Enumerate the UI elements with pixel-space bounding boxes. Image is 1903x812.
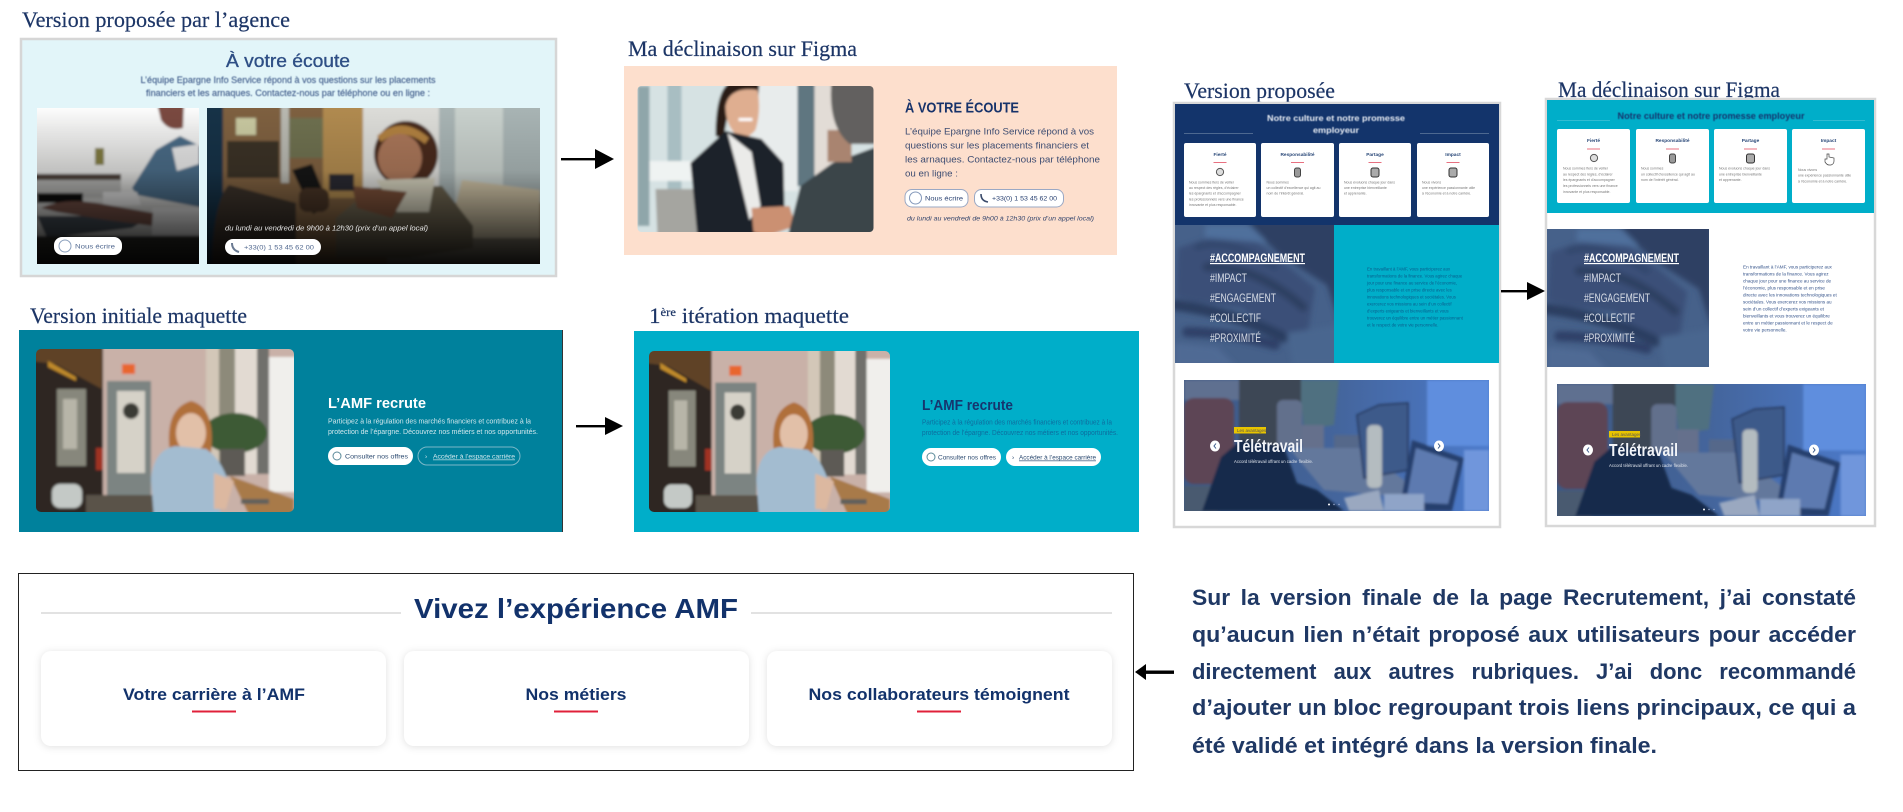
bandeau cyan: Notre culture et notre promesse employeur — [1618, 110, 1805, 121]
bloc hashtags: #ACCOMPAGNEMENT — [1210, 253, 1305, 265]
paragraphe: protection de l’épargne. Découvrez nos métiers et nos opportunités. — [328, 429, 538, 436]
titre: l'amf recrute: L’AMF recrute — [328, 396, 426, 412]
text block: commentaire final: qu’aucun lien n’était proposé aux utilisateurs pour accéder — [1192, 622, 1856, 647]
carte: partage: et apprenante. — [1344, 192, 1367, 196]
carrousel: télétravail: Télétravail — [1234, 436, 1303, 456]
carte: responsabilité: un collectif d’excellence qui agit au — [1266, 186, 1320, 190]
bloc texte cyan: trouverez un équilibre entre un métier passionnant — [1367, 316, 1464, 320]
carte: partage: Nous évoluons chaque jour dans — [1719, 166, 1770, 170]
carte: responsabilité: Nous sommes — [1266, 180, 1289, 184]
heading: ma déclinaison sur figma droite: Ma déclinaison sur Figma — [1558, 77, 1780, 102]
horaires: du lundi au vendredi de 9h00 à 12h30 (prix d’un appel local) — [225, 224, 428, 232]
button: téléphone — [225, 239, 321, 255]
paragraphe: protection de l’épargne. Découvrez nos métiers et nos opportunités. — [922, 430, 1118, 437]
button: espace carrière — [1006, 448, 1101, 466]
heading: 1ère itération maquette: ère — [661, 305, 676, 319]
bloc texte cyan: innovations technologiques et sociétales. Vous — [1367, 294, 1456, 300]
photo: femme au café — [36, 349, 294, 512]
paragraphe: questions sur les placements financiers et — [905, 140, 1089, 152]
carte: responsabilité — [1261, 143, 1334, 217]
button: nous écrire: Nous écrire — [925, 196, 963, 202]
bandeau navy: Notre culture et notre promesse — [1267, 113, 1405, 123]
bloc hashtags: #ENGAGEMENT — [1584, 293, 1650, 305]
carte: fierté: les professionnels vers une finance — [1563, 184, 1618, 188]
bloc hashtags — [1175, 220, 1340, 365]
carte: partage — [1339, 143, 1411, 217]
carte: responsabilité: un collectif d’excellence qui agit au — [1641, 172, 1695, 176]
paragraphe — [905, 126, 1100, 180]
carte: fierté: innovante et plus responsable. — [1189, 203, 1237, 207]
bloc texte cyan: et le respect de votre vie personnelle. — [1367, 322, 1438, 328]
carte: impact — [1417, 143, 1489, 217]
button: consulter nos offres: Consulter nos offres — [938, 454, 997, 462]
paragraphe: Participez à la régulation des marchés financiers et contribuez à la — [922, 420, 1112, 426]
carrousel: télétravail — [1184, 375, 1489, 512]
button: consulter nos offres — [328, 447, 413, 465]
panel: déclinaison figma culture employeur — [1546, 99, 1875, 526]
titre: l'amf recrute: L’AMF recrute — [922, 398, 1013, 414]
paragraphe déclinaison: sein d’un collectif d’experts exigeants et — [1743, 306, 1825, 312]
arrow: agence vers figma — [561, 149, 614, 169]
paragraphe — [922, 420, 1118, 437]
photo: poignée de main — [638, 86, 874, 232]
carte: nos métiers: Nos métiers — [526, 685, 626, 704]
carte: responsabilité: Nous sommes — [1641, 166, 1664, 170]
paragraphe déclinaison: votre vie personnelle. — [1743, 328, 1787, 332]
button: consulter nos offres — [922, 448, 1001, 466]
bloc texte cyan: plus responsable et en prise directe avec les — [1367, 288, 1452, 292]
arrow: version proposée vers figma — [1501, 282, 1545, 300]
carte: fierté: Fierté — [1213, 152, 1227, 158]
heading: ma déclinaison sur figma: Ma déclinaison sur Figma — [628, 36, 857, 61]
heading: 1ère itération maquette: itération maquette — [676, 303, 849, 328]
button: espace carrière: Accéder à l’espace carrière — [433, 454, 515, 460]
titre: à votre écoute: À VOTRE ÉCOUTE — [905, 100, 1019, 116]
photo: personne au clavier — [37, 108, 199, 264]
button: espace carrière: Accéder à l’espace carrière — [1019, 454, 1096, 462]
heading: version proposée par l'agence: Version proposée par l’agence — [22, 7, 290, 32]
panel: 1ère itération amf recrute — [634, 331, 1139, 532]
carte: nos métiers — [404, 651, 749, 746]
carte: impact: Nous vivons — [1422, 180, 1441, 184]
carte: partage: Partage — [1366, 152, 1384, 158]
bloc texte cyan: jour pour une finance au service de l’économie, — [1366, 280, 1457, 286]
carrousel: télétravail: Télétravail — [1609, 440, 1678, 460]
button: nous écrire — [905, 190, 968, 207]
carte: impact — [1792, 129, 1865, 203]
carte: impact: à l’économie et à notre carrière. — [1798, 180, 1847, 184]
button: téléphone — [974, 190, 1064, 207]
paragraphe déclinaison: entre un métier passionnant et le respect de — [1743, 320, 1833, 326]
paragraphe: L’équipe Epargne Info Service répond à vos — [905, 126, 1094, 138]
carte: partage: une entreprise bienveillante — [1719, 172, 1762, 176]
carte: partage: une entreprise bienveillante — [1344, 186, 1387, 190]
carte: responsabilité: nom de l’intérêt général. — [1266, 192, 1304, 196]
horaires: du lundi au vendredi de 9h00 à 12h30 (prix d’un appel local) — [907, 216, 1094, 222]
paragraphe: ou en ligne : — [905, 168, 958, 180]
paragraphe déclinaison: chaque jour pour une finance au service de — [1743, 278, 1832, 284]
paragraphe: Participez à la régulation des marchés financiers et contribuez à la — [328, 418, 531, 426]
text block: commentaire final: Sur la version finale de la page Recrutement, j’ai constaté — [1192, 585, 1856, 610]
carte: impact: Impact — [1445, 152, 1461, 158]
text block: commentaire final — [1192, 585, 1857, 758]
text block: commentaire final: d’ajouter un bloc regroupant trois liens principaux, ce qui a — [1192, 695, 1857, 720]
panel: vivez l'expérience amf — [18, 574, 1134, 770]
carte: impact: une expérience passionnante utile — [1422, 186, 1475, 190]
button: espace carrière — [418, 447, 520, 465]
carte: fierté: les épargnants et d’accompagner — [1563, 178, 1616, 182]
paragraphe déclinaison: bienveillants et vous trouverez un équilibre — [1743, 314, 1830, 318]
paragraphe déclinaison: l’économie, plus responsable et en prise — [1743, 286, 1825, 290]
carrousel: télétravail: Accord télétravail offrant un cadre flexible. — [1234, 459, 1313, 464]
panel: déclinaison figma à votre écoute — [624, 66, 1117, 255]
panel intro text: financiers et les arnaques. Contactez-nous par téléphone ou en ligne : — [146, 88, 430, 98]
bloc hashtags — [1547, 224, 1712, 369]
bloc hashtags: #PROXIMITÉ — [1584, 332, 1635, 345]
panel: version proposée culture employeur — [1174, 103, 1500, 527]
carte: responsabilité: Responsabilité — [1655, 138, 1690, 144]
arrow: texte vers bloc final — [1135, 664, 1174, 680]
carte: partage: Partage — [1742, 138, 1760, 144]
heading: version proposée: Version proposée — [1184, 78, 1335, 103]
carte: fierté: Nous sommes fiers de veiller — [1189, 180, 1235, 184]
carte: impact: à l’économie et à notre carrière. — [1422, 192, 1471, 196]
paragraphe déclinaison — [1743, 264, 1837, 332]
carte: collaborateurs — [767, 651, 1112, 746]
carte: fierté: Fierté — [1587, 138, 1600, 144]
carte: fierté: au respect des règles, d’éclairer — [1189, 186, 1239, 190]
carte: partage: Nous évoluons chaque jour dans — [1344, 180, 1395, 184]
carte: fierté: au respect des règles, d’éclairer — [1563, 172, 1613, 176]
panel title: à votre écoute: À votre écoute — [226, 51, 350, 71]
button: téléphone: +33(0) 1 53 45 62 00 — [992, 196, 1057, 202]
text block: commentaire final: été validé et intégré dans la version finale. — [1192, 733, 1657, 758]
carte: partage — [1714, 129, 1787, 203]
button: nous écrire: Nous écrire — [75, 244, 115, 250]
carte: fierté: Nous sommes fiers de veiller — [1563, 166, 1609, 170]
button: espace carrière: › — [1012, 454, 1014, 462]
carrousel: télétravail — [1557, 379, 1866, 517]
carte: responsabilité — [1636, 129, 1709, 203]
heading: 1ère itération maquette: 1 — [649, 303, 660, 328]
heading: version initiale maquette: Version initiale maquette — [30, 303, 247, 328]
panel: version initiale amf recrute — [19, 330, 563, 532]
photo: femme au téléphone — [207, 108, 540, 264]
carte: responsabilité: nom de l’intérêt général. — [1641, 178, 1679, 182]
bandeau navy: employeur — [1313, 125, 1360, 135]
bloc texte cyan: d’experts exigeants et bienveillants et vous — [1367, 308, 1449, 314]
paragraphe déclinaison: sociétales. Vous exercerez vos missions au — [1743, 300, 1832, 304]
button: consulter nos offres: Consulter nos offres — [345, 454, 409, 460]
button: nous écrire — [54, 237, 122, 255]
bloc texte cyan: En travaillant à l’AMF, vous participerez aux — [1367, 266, 1451, 272]
carte: votre carrière: Votre carrière à l’AMF — [123, 685, 305, 704]
carte: fierté — [1557, 129, 1630, 203]
carte: fierté: les épargnants et d’accompagner — [1189, 192, 1242, 196]
bloc hashtags: #COLLECTIF — [1210, 313, 1261, 325]
paragraphe déclinaison: transformations de la finance. Vous agirez — [1743, 272, 1829, 276]
carte: fierté: innovante et plus responsable. — [1563, 190, 1611, 194]
bloc texte cyan — [1334, 225, 1499, 363]
carte: fierté: les professionnels vers une finance — [1189, 198, 1244, 202]
paragraphe: les arnaques. Contactez-nous par téléphone — [905, 154, 1100, 166]
text block: commentaire final: directement aux autres rubriques. J’ai donc recommandé — [1192, 659, 1856, 684]
bloc hashtags: #ENGAGEMENT — [1210, 293, 1276, 305]
bandeau cyan — [1547, 100, 1874, 213]
paragraphe — [328, 418, 538, 436]
filets titre — [41, 612, 1112, 614]
carrousel: télétravail: Accord télétravail offrant un cadre flexible. — [1609, 463, 1688, 468]
bandeau navy — [1175, 104, 1499, 225]
bloc hashtags: #COLLECTIF — [1584, 313, 1635, 325]
carte: collaborateurs: Nos collaborateurs témoignent — [808, 685, 1070, 704]
paragraphe déclinaison: directe avec les innovations technologiques et — [1743, 292, 1837, 298]
carte: partage: et apprenante. — [1719, 178, 1742, 182]
carte: impact: Nous vivons — [1798, 168, 1817, 172]
photo: femme au café — [649, 351, 890, 512]
carte: responsabilité: Responsabilité — [1280, 152, 1315, 158]
panel intro text — [140, 75, 436, 98]
panel intro text: L’équipe Epargne Info Service répond à vos questions sur les placements — [140, 75, 436, 85]
button: téléphone: +33(0) 1 53 45 62 00 — [244, 244, 314, 252]
titre: vivez l'expérience amf: Vivez l’expérience AMF — [414, 593, 738, 624]
carrousel: télétravail: Les avantages — [1612, 432, 1642, 437]
carte: impact: une expérience passionnante utile — [1798, 174, 1851, 178]
bloc texte cyan: transformations de la finance. Vous agirez chaque — [1367, 274, 1463, 278]
carrousel: télétravail: Les avantages — [1237, 428, 1267, 433]
bloc hashtags: #IMPACT — [1584, 273, 1621, 285]
bloc texte cyan: exercerez vos missions au sein d’un collectif — [1367, 302, 1452, 306]
paragraphe déclinaison: En travaillant à l’AMF, vous participerez aux — [1743, 264, 1833, 270]
carte: impact: Impact — [1821, 138, 1837, 144]
bloc hashtags: #IMPACT — [1210, 273, 1247, 285]
carte: votre carrière — [41, 651, 386, 746]
panel: version agence — [21, 39, 556, 276]
button: espace carrière: › — [425, 454, 427, 460]
carte: fierté — [1184, 143, 1256, 217]
arrow: version initiale vers itération — [576, 417, 623, 435]
bloc hashtags: #PROXIMITÉ — [1210, 332, 1261, 345]
bloc hashtags: #ACCOMPAGNEMENT — [1584, 253, 1679, 265]
